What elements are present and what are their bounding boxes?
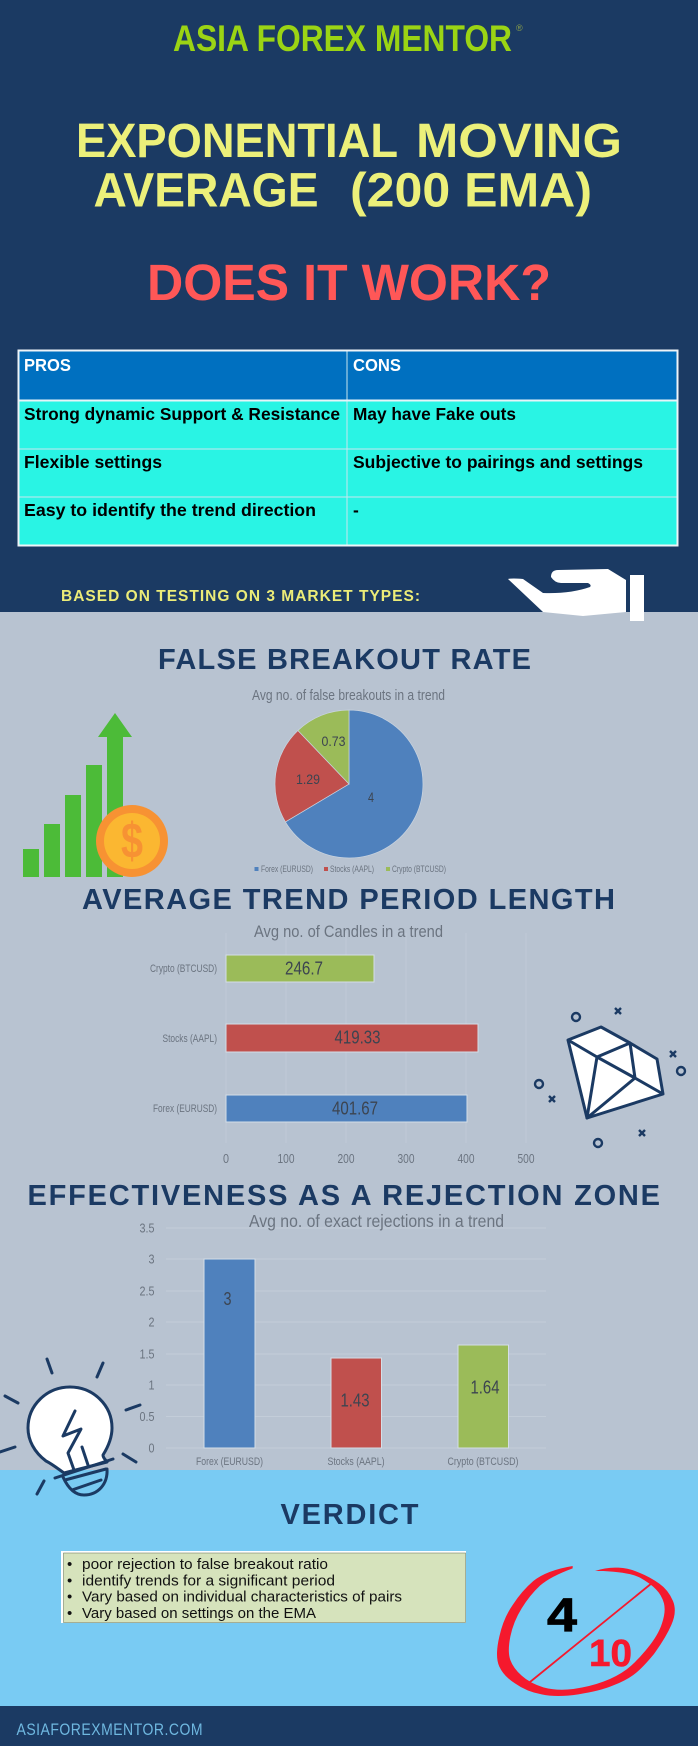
bullet 2: •	[67, 1572, 72, 1590]
title: EXPONENTIAL	[76, 115, 398, 168]
icon: open hand	[508, 569, 644, 621]
heading: false breakout rate: FALSE BREAKOUT RATE	[158, 644, 531, 676]
table: pros and cons	[18, 350, 678, 546]
pro 1: Strong dynamic Support & Resistance	[24, 404, 340, 424]
chart: exact rejections	[140, 1211, 546, 1468]
bullet 2: identify trends for a significant period	[82, 1572, 335, 1590]
pro 2: Flexible settings	[24, 452, 162, 472]
panel: navy footer	[0, 1706, 698, 1746]
panel: grey charts section	[0, 612, 698, 1470]
value axis labels: 200	[338, 1151, 354, 1166]
logo: Asia Forex Mentor: ®	[516, 23, 523, 33]
value axis labels: 100	[278, 1151, 294, 1166]
table header: pros: PROS	[24, 355, 71, 375]
icon: dollar coin	[96, 805, 168, 877]
bullet 1: poor rejection to false breakout ratio	[82, 1556, 328, 1573]
value axis labels: 0	[223, 1151, 229, 1166]
subheading: based on testing: BASED ON TESTING ON 3 MARKET TYPES:	[61, 588, 420, 605]
bullet 1: •	[67, 1556, 72, 1573]
category labels: Forex (EURUSD)	[153, 1103, 217, 1115]
pie legend	[254, 864, 446, 874]
bar values: 401.67	[332, 1098, 378, 1118]
con 3: -	[353, 500, 359, 520]
score value: 4	[547, 1588, 577, 1641]
panel: light blue verdict section	[0, 1470, 698, 1706]
chart: candles in a trend	[150, 922, 534, 1166]
pie slice: forex	[285, 710, 423, 858]
bullet 4: Vary based on settings on the EMA	[82, 1605, 316, 1622]
bar values: 1.43	[340, 1390, 370, 1410]
heading: effectiveness as a rejection zone: EFFECTIVENESS AS A REJECTION ZONE	[28, 1180, 660, 1212]
score: 4 out of 10	[497, 1566, 675, 1696]
value axis labels: 2	[148, 1314, 154, 1330]
value axis labels: 3	[148, 1252, 154, 1266]
bar: crypto	[458, 1345, 508, 1448]
con 2: Subjective to pairings and settings	[353, 452, 643, 472]
bar values: 246.7	[285, 958, 323, 978]
value axis labels: 2.5	[140, 1284, 154, 1298]
hand-drawn red circle	[497, 1566, 675, 1696]
bar: forex	[204, 1259, 255, 1448]
category labels	[196, 1456, 518, 1468]
value axis labels: 300	[398, 1151, 414, 1166]
value axis labels: 0.5	[140, 1409, 154, 1424]
footer url: ASIAFOREXMENTOR.COM	[16, 1721, 202, 1739]
bar values	[285, 958, 380, 1118]
bar values	[224, 1289, 500, 1410]
bar: stocks	[331, 1358, 382, 1448]
pie labels	[296, 733, 374, 805]
value axis labels: 3.5	[140, 1220, 154, 1236]
con 1: May have Fake outs	[353, 404, 516, 424]
title: (200 EMA)	[350, 164, 592, 218]
chart title: Avg no. of Candles in a trend	[254, 922, 443, 941]
title: MOVING	[416, 115, 622, 168]
pie labels: 4	[368, 789, 374, 805]
pro 3: Easy to identify the trend direction	[24, 500, 316, 520]
value axis labels: 1	[148, 1378, 154, 1392]
category labels	[150, 963, 217, 1115]
chart title: Avg no. of exact rejections in a trend	[249, 1211, 504, 1231]
icon: light bulb	[0, 1359, 140, 1495]
value axis labels: 500	[518, 1151, 534, 1166]
pie legend: Forex (EURUSD)	[261, 864, 313, 874]
bar: stocks	[226, 1024, 478, 1052]
title	[76, 115, 622, 218]
slash	[530, 1583, 652, 1682]
chart title: Avg no. of false breakouts in a trend	[252, 688, 445, 704]
logo: Asia Forex Mentor: ASIA FOREX MENTOR	[173, 18, 512, 59]
value axis labels: 400	[458, 1151, 474, 1166]
chart: false breakouts pie	[252, 688, 446, 874]
value axis labels	[223, 1151, 534, 1166]
pie labels: 0.73	[322, 733, 346, 749]
bullet 3: Vary based on individual characteristics of pairs	[82, 1588, 402, 1606]
bar values: 419.33	[334, 1028, 380, 1048]
pie legend: Crypto (BTCUSD)	[392, 864, 446, 874]
table header: cons: CONS	[353, 355, 401, 375]
category labels: Crypto (BTCUSD)	[150, 963, 217, 975]
pie slice: stocks	[275, 730, 349, 822]
heading: does it work: DOES IT WORK?	[147, 254, 551, 311]
bullet 3: •	[67, 1588, 72, 1606]
pie labels: 1.29	[296, 771, 320, 787]
bullet 4: •	[67, 1605, 72, 1622]
panel: navy header	[0, 0, 698, 612]
callout: verdict notes	[61, 1551, 466, 1623]
icon: growth chart with coin	[23, 713, 168, 877]
pie legend: Stocks (AAPL)	[330, 864, 374, 874]
title: AVERAGE	[94, 164, 318, 218]
bar: forex	[226, 1095, 467, 1122]
category labels: Forex (EURUSD)	[196, 1456, 263, 1468]
category labels: Stocks (AAPL)	[328, 1456, 384, 1468]
category labels: Stocks (AAPL)	[162, 1033, 217, 1045]
icon: diamond	[535, 1008, 685, 1147]
value axis labels	[140, 1220, 154, 1456]
bar: crypto	[226, 955, 374, 982]
heading: average trend period length: AVERAGE TREND PERIOD LENGTH	[82, 884, 615, 916]
bar values: 3	[224, 1289, 232, 1309]
icon: dollar coin: $	[121, 813, 143, 869]
pie slice: crypto	[298, 710, 349, 784]
score total: 10	[589, 1633, 632, 1675]
heading: verdict: VERDICT	[280, 1499, 419, 1531]
value axis labels: 1.5	[140, 1346, 154, 1362]
bar values: 1.64	[470, 1378, 500, 1398]
value axis labels: 0	[148, 1440, 154, 1456]
category labels: Crypto (BTCUSD)	[448, 1456, 518, 1468]
